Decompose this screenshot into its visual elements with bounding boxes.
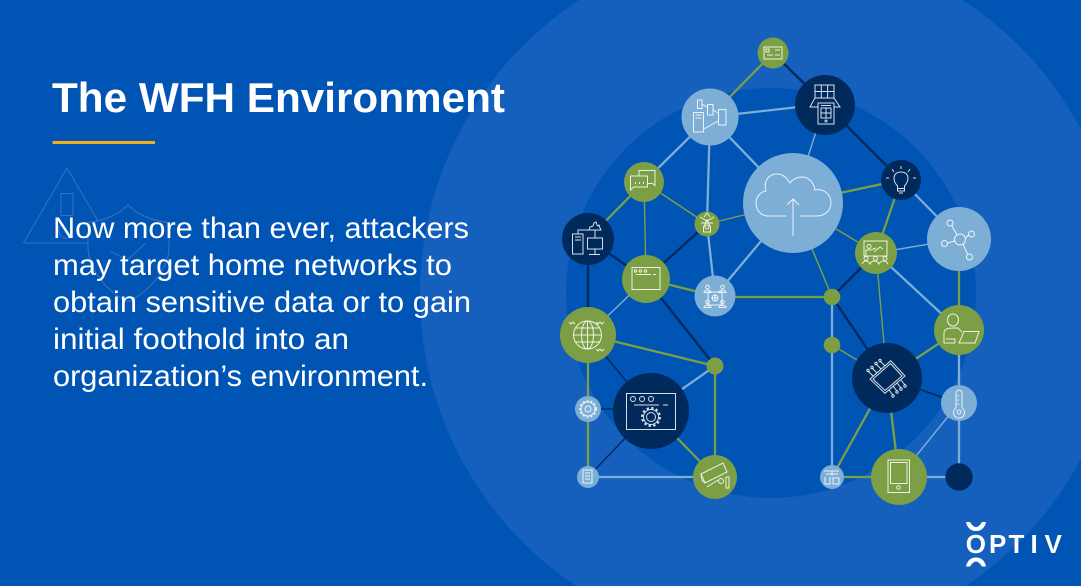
logo: Optiv: OPTIV (966, 529, 1062, 559)
node: junction dot (706, 358, 724, 374)
node: app settings (613, 373, 689, 449)
body text: Now more than ever, attackers (53, 212, 469, 245)
network connections (588, 53, 959, 477)
node: junction dot (824, 289, 840, 305)
logo: Optiv (966, 522, 1062, 566)
node: thermometer (941, 385, 977, 421)
node: servers (682, 88, 738, 146)
node: microchip (852, 343, 922, 413)
node: computers (562, 213, 614, 265)
node: card (758, 38, 788, 68)
node: light bulb (881, 160, 921, 200)
node: globe (560, 307, 616, 363)
node: chat (624, 162, 664, 202)
body text: may target home networks to (53, 249, 452, 282)
body text: organization’s environment. (53, 360, 428, 393)
node: tablet (871, 449, 927, 505)
node: floor plan (820, 465, 844, 489)
body text: obtain sensitive data or to gain (53, 286, 471, 319)
node: hub (927, 207, 991, 271)
node: dark dot (945, 463, 973, 491)
node: network people (694, 276, 736, 316)
node: teaching (855, 232, 897, 274)
node: security camera (693, 455, 737, 499)
node: person with laptop (934, 305, 984, 355)
node: cloud upload (743, 153, 843, 253)
title underline (52, 141, 155, 144)
node: browser window (622, 255, 670, 303)
node: junction dot (824, 337, 840, 353)
node: document (577, 466, 599, 488)
body text: initial foothold into an (53, 323, 349, 356)
node: smart building (795, 75, 855, 135)
body text (53, 212, 471, 393)
node: transmission tower (694, 212, 720, 236)
node: gear (575, 396, 601, 422)
title: The WFH Environment (52, 74, 505, 121)
background icon: warning triangle and shield (24, 168, 169, 302)
